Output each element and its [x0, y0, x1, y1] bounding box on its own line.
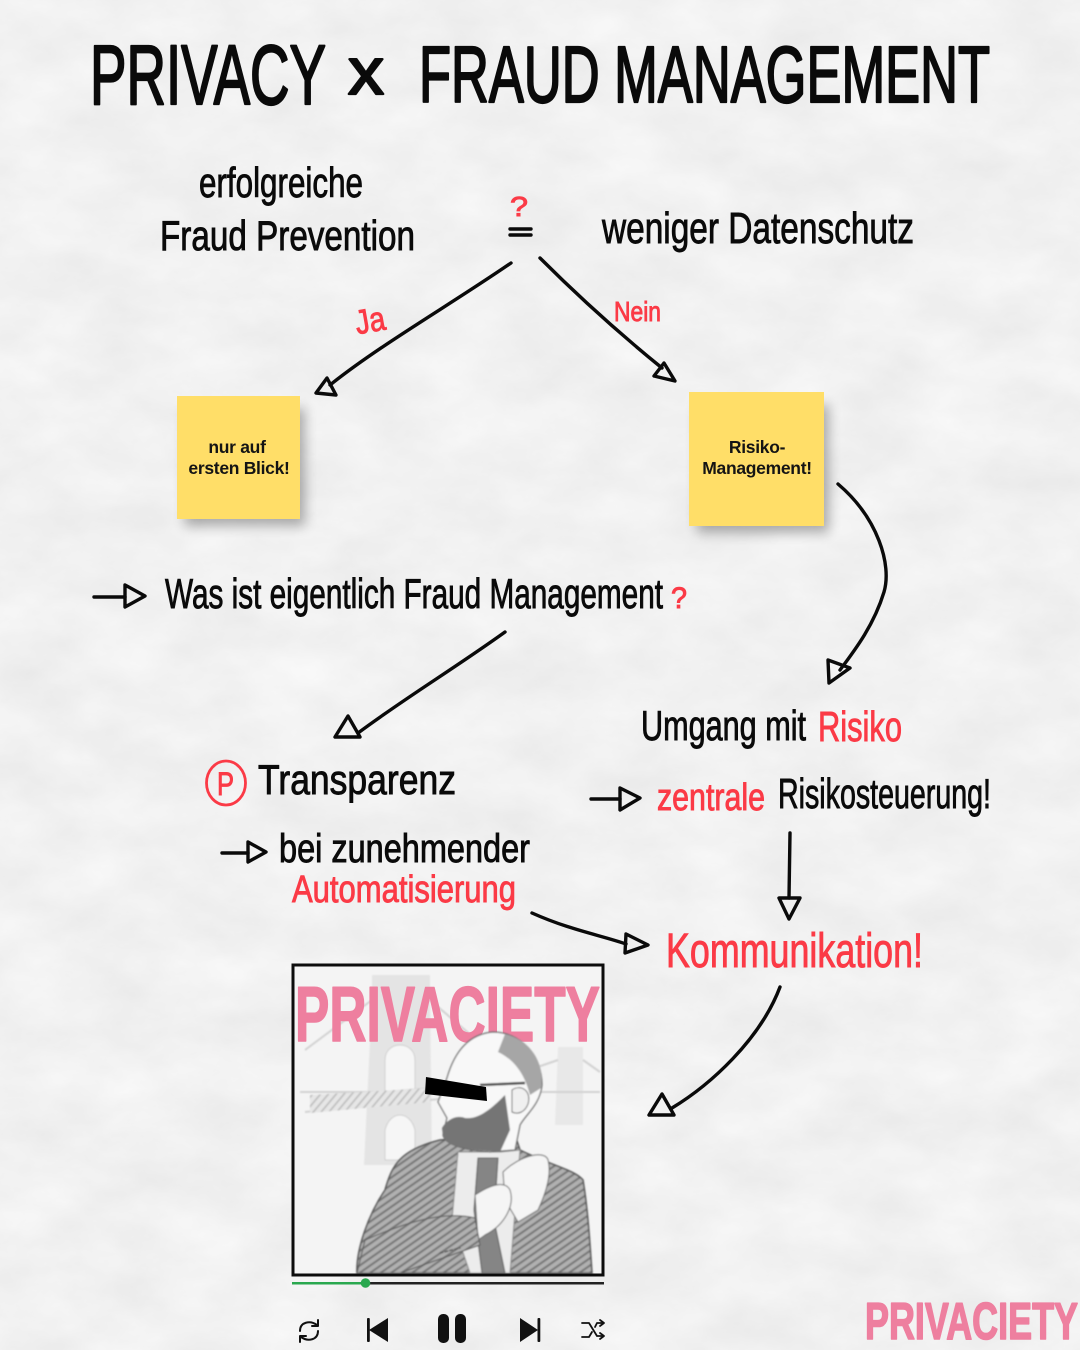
portrait sketch	[357, 1032, 592, 1273]
arrow: to Transparenz	[335, 632, 505, 737]
text: Kommunikation: Kommunikation!	[666, 925, 923, 978]
title	[90, 28, 990, 122]
icon: shuffle	[582, 1320, 604, 1339]
title: PRIVACY	[90, 28, 326, 122]
hands	[503, 1155, 549, 1222]
arrow: Risiko-Management to Umgang mit Risiko	[828, 484, 886, 683]
head	[438, 1032, 542, 1152]
censor bar	[425, 1077, 487, 1101]
small arrow: zentrale Risikosteuerung	[591, 788, 640, 810]
sticky note: nur auf ersten Blick	[177, 396, 305, 526]
shirt	[452, 1150, 520, 1273]
text: zentrale Risikosteuerung: zentrale	[657, 777, 765, 819]
arrow: to Kommunikation from top	[779, 833, 800, 919]
text: zentrale Risikosteuerung	[657, 770, 991, 819]
hair	[498, 1034, 542, 1095]
bridge sketch	[300, 975, 600, 1165]
label: Ja: Ja	[352, 300, 388, 342]
arrow: Automatisierung to Kommunikation	[532, 913, 648, 953]
icon: repeat	[300, 1320, 318, 1342]
question equals sign: ?	[510, 191, 528, 222]
icon: circled P: P	[217, 766, 234, 802]
text: Umgang mit Risiko: Risiko	[818, 703, 902, 750]
text: bei zunehmender Automatisierung: bei zunehmender	[279, 827, 530, 871]
small arrow: bei zunehmender	[222, 842, 266, 862]
arrow: Nein	[540, 258, 675, 381]
sticky note: nur auf ersten Blick: nur auf	[208, 437, 266, 457]
text: erfolgreiche Fraud Prevention: Fraud Prevention	[160, 212, 415, 259]
arrow: Kommunikation to podcast	[649, 987, 780, 1115]
text: erfolgreiche Fraud Prevention: erfolgreiche	[199, 159, 363, 206]
icon: pause	[438, 1314, 466, 1343]
question equals sign	[510, 191, 531, 235]
label: Nein: Nein	[614, 296, 661, 327]
sticky note: Risiko-Management: Risiko-	[729, 437, 786, 457]
sticky note: nur auf ersten Blick: ersten Blick!	[188, 458, 290, 478]
text: bei zunehmender Automatisierung	[279, 827, 530, 911]
small arrow: Was ist	[94, 585, 145, 607]
glasses arm	[480, 1083, 525, 1085]
icon: next	[520, 1318, 540, 1342]
progress bar	[292, 1278, 604, 1288]
sleeve buttons	[440, 1248, 460, 1253]
icon: previous	[367, 1318, 388, 1342]
arrow: Ja	[316, 263, 511, 395]
text: Transparenz: Transparenz	[258, 756, 456, 803]
sticky note: Risiko-Management	[689, 392, 829, 533]
beard	[442, 1095, 510, 1152]
sleeve	[357, 1216, 480, 1273]
podcast cover	[293, 965, 603, 1275]
text: Umgang mit Risiko: Umgang mit	[641, 702, 806, 749]
question: Was ist eigentlich Fraud Management: ?	[671, 582, 687, 615]
sticky note: Risiko-Management: Management!	[702, 458, 812, 478]
icon: circled P	[206, 761, 246, 805]
text: weniger Datenschutz: weniger Datenschutz	[601, 204, 914, 253]
jacket	[357, 1135, 592, 1273]
brand title: PRIVACIETY	[295, 970, 600, 1058]
text: erfolgreiche Fraud Prevention	[160, 159, 415, 259]
tie	[474, 1158, 505, 1273]
text: bei zunehmender Automatisierung: Automatisierung	[292, 869, 516, 911]
ear	[512, 1088, 529, 1113]
question: Was ist eigentlich Fraud Management: Was ist eigentlich Fraud Management	[165, 570, 663, 617]
title: x	[348, 34, 384, 108]
